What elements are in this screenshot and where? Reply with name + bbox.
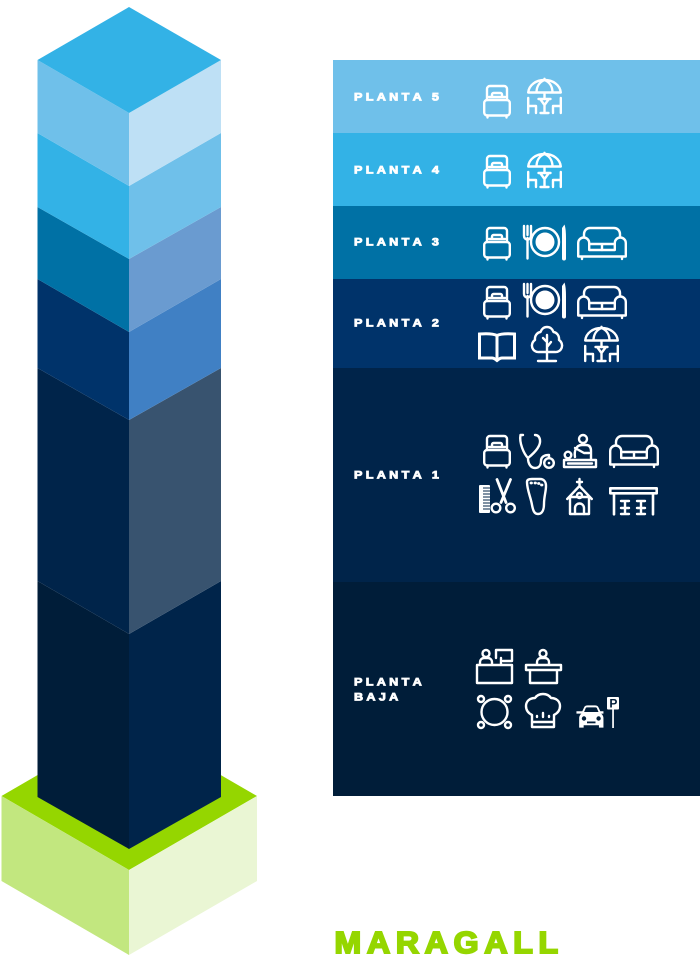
icon: bar — [610, 488, 657, 514]
icon: meeting table — [478, 696, 511, 728]
icon: comb and scissors — [479, 480, 515, 513]
icon: car parking — [576, 697, 619, 728]
icon: massage — [564, 435, 596, 467]
building base block — [2, 722, 257, 955]
icon: bed — [484, 156, 510, 188]
panel: planta 1 — [333, 368, 700, 582]
label: planta 2: PLANTA 2 — [354, 316, 442, 329]
icon: tree — [532, 327, 562, 361]
icon: church — [567, 479, 592, 514]
label: planta baja — [354, 675, 425, 703]
label: planta baja: PLANTA — [354, 675, 425, 688]
icon: sofa — [610, 436, 658, 467]
planta 5 volume — [38, 60, 221, 186]
icon: dining — [524, 282, 566, 318]
panel: planta 2 — [333, 279, 700, 368]
title: Maragall: MARAGALL — [334, 926, 564, 960]
icon: bed — [484, 86, 510, 118]
icon: bed — [484, 436, 510, 468]
panel: planta 3 — [333, 206, 700, 279]
panel: planta baja — [333, 582, 700, 796]
icon: terrace — [528, 79, 561, 113]
label: planta 5: PLANTA 5 — [354, 90, 442, 103]
icon: dining — [524, 224, 566, 260]
planta 1 volume — [38, 368, 221, 634]
icon: terrace — [585, 327, 618, 361]
planta baja volume — [38, 581, 221, 849]
icon: sofa — [578, 287, 626, 318]
isometric tower — [38, 7, 221, 849]
planta 3 volume — [38, 207, 221, 332]
panel: planta 4 — [333, 133, 700, 206]
icon: book — [480, 334, 514, 360]
label: planta 3: PLANTA 3 — [354, 235, 442, 248]
icon: sofa — [578, 228, 626, 259]
icon: check-in desk — [477, 650, 512, 683]
icon: foot — [527, 479, 546, 514]
icon: reception — [526, 650, 561, 683]
icon: bed — [484, 228, 510, 260]
icon: stethoscope — [520, 435, 554, 468]
tower roof — [38, 7, 221, 113]
icon: bed — [484, 287, 510, 318]
panel: planta 5 — [333, 60, 700, 133]
label: planta baja: BAJA — [354, 690, 402, 703]
planta 2 volume — [38, 279, 221, 420]
planta 4 volume — [38, 133, 221, 259]
icon: terrace — [528, 153, 561, 187]
label: planta 4: PLANTA 4 — [354, 163, 442, 176]
icon: car parking: P — [609, 697, 617, 711]
label: planta 1: PLANTA 1 — [354, 468, 442, 481]
icon: chef hat — [526, 694, 560, 727]
